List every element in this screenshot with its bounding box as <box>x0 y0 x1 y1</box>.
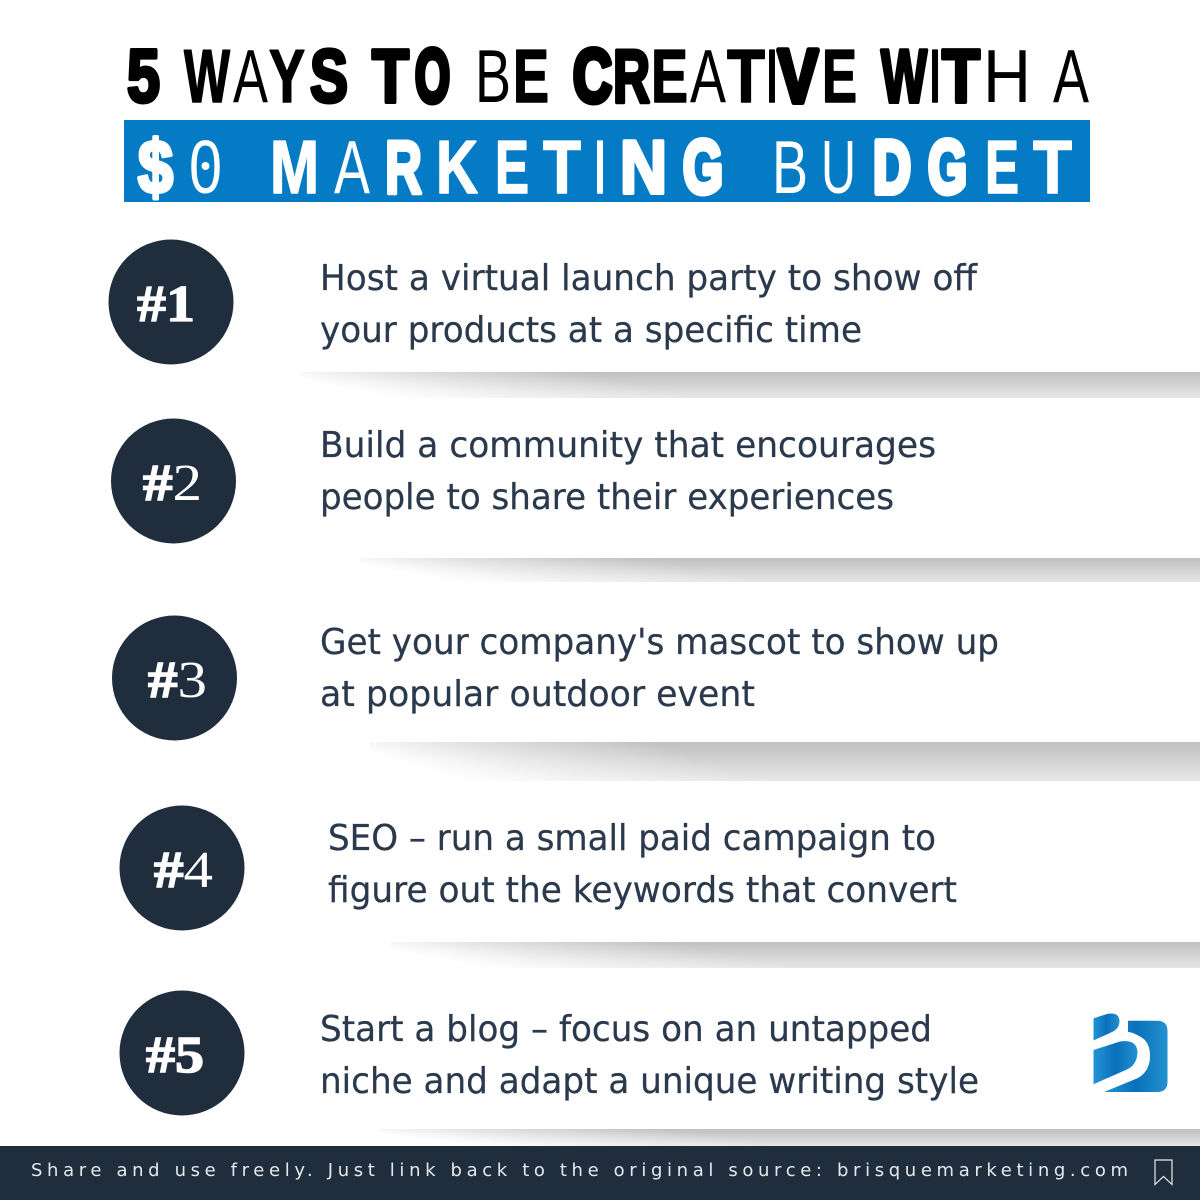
number badge 3 <box>112 616 237 740</box>
title banner: N <box>620 125 667 209</box>
title line 1: E <box>822 34 857 118</box>
footer text: Share and use freely. Just link back to the original source: brisquemarketing.com <box>31 1160 1128 1181</box>
title banner: T <box>543 125 581 209</box>
title banner <box>124 120 1090 209</box>
title line 1: T <box>372 34 409 118</box>
title line 1: W <box>881 34 927 118</box>
tip 1 <box>108 240 1200 398</box>
tip 4 text <box>328 818 957 911</box>
shadow band 5 <box>380 1129 1200 1146</box>
tip 2 text <box>320 425 936 518</box>
icon: brand logo <box>1094 1013 1168 1092</box>
tip 5 text: Start a blog – focus on an untapped <box>320 1009 932 1050</box>
tip 3 text: at popular outdoor event <box>320 674 755 715</box>
title line 1: V <box>778 34 818 118</box>
number badge 2 <box>111 418 236 544</box>
shadow band 2 <box>360 558 1200 582</box>
title line 1: T <box>942 34 980 118</box>
shadow band 1 <box>300 372 1200 398</box>
title banner: R <box>385 125 422 209</box>
tip 1 text <box>320 258 978 351</box>
number badge 5 <box>120 990 244 1116</box>
tip 2 text: Build a community that encourages <box>320 425 936 466</box>
tip 2 <box>111 418 1200 582</box>
tip 3 <box>112 616 1200 781</box>
title banner: I <box>595 125 605 209</box>
title line 1: A <box>233 34 268 118</box>
number badge 2: #2 <box>143 455 202 512</box>
title banner: M <box>270 125 319 209</box>
number badge 4: #4 <box>154 842 213 899</box>
tip 5 text: niche and adapt a unique writing style <box>320 1061 979 1102</box>
title line 1: H <box>983 34 1031 118</box>
title line 1: C <box>573 34 612 118</box>
tip 2 text: people to share their experiences <box>320 477 894 518</box>
title line 1: A <box>1053 34 1089 118</box>
tip 4 text: figure out the keywords that convert <box>328 870 957 911</box>
shadow band 3 <box>370 742 1200 781</box>
title line 1: R <box>613 34 650 118</box>
title banner: E <box>985 125 1019 209</box>
title line 1: 5 <box>127 34 160 118</box>
tip 3 text <box>320 622 999 715</box>
title line 1: T <box>727 34 765 118</box>
tip 1 text: your products at a specific time <box>320 310 862 351</box>
number badge 1 <box>108 240 234 364</box>
tip 5 <box>120 990 1200 1146</box>
number badge 4 <box>120 806 244 930</box>
number badge 3: #3 <box>148 652 207 709</box>
title banner: A <box>334 125 370 209</box>
title line 1: E <box>513 34 549 118</box>
title line 1: E <box>651 34 688 118</box>
tip 3 text: Get your company's mascot to show up <box>320 622 999 663</box>
title banner: D <box>873 125 911 209</box>
tip 4 <box>120 806 1200 968</box>
title line 1: B <box>475 34 511 118</box>
tip 5 text <box>320 1009 979 1102</box>
title banner: U <box>821 125 856 209</box>
title line 1: Y <box>269 34 305 118</box>
title banner: T <box>1033 125 1072 209</box>
title line 1: W <box>184 34 230 118</box>
title banner: 0 <box>189 125 222 209</box>
title line 1: S <box>310 34 348 118</box>
title line 1: O <box>415 34 450 118</box>
number badge 1: #1 <box>137 276 195 333</box>
title banner: K <box>436 125 478 209</box>
tip 4 text: SEO – run a small paid campaign to <box>328 818 936 859</box>
footer bar <box>0 1146 1200 1200</box>
shadow band 4 <box>390 942 1200 968</box>
title line 1: A <box>690 34 726 118</box>
icon: bookmark <box>1155 1160 1172 1184</box>
title line 1: I <box>767 34 777 118</box>
title line 1: I <box>930 34 940 118</box>
title line 1 <box>127 34 1089 118</box>
title banner: G <box>683 125 723 209</box>
title banner: $ <box>138 125 173 209</box>
number badge 5: #5 <box>146 1027 204 1084</box>
title banner: B <box>772 125 808 209</box>
tip 1 text: Host a virtual launch party to show off <box>320 258 978 299</box>
title banner: G <box>928 125 967 209</box>
title banner: E <box>495 125 529 209</box>
